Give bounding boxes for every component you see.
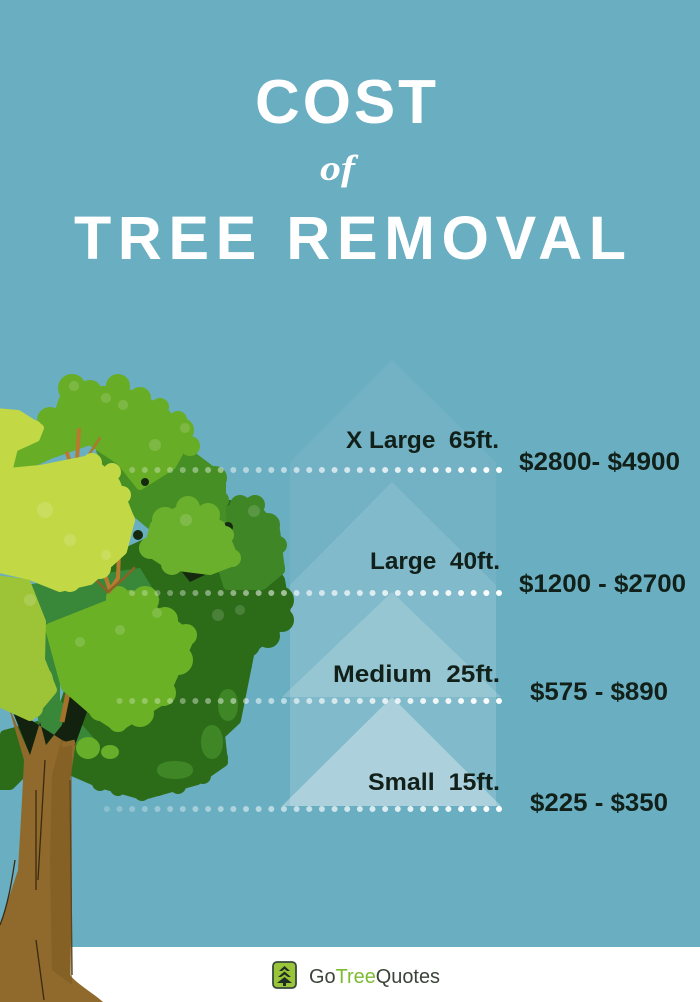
brown fork in the centre — [96, 552, 134, 592]
small lower patch of foliage — [76, 737, 119, 759]
size labels — [333, 427, 500, 796]
middle lobe — [143, 500, 237, 571]
tree illustration — [0, 378, 289, 1002]
size labels: Small 15ft. — [368, 769, 500, 796]
trunk — [0, 695, 103, 1002]
foliage speckle highlights — [24, 381, 260, 647]
brand name: GoTreeQuotes — [309, 966, 440, 988]
yellow-green top lobe — [0, 412, 131, 588]
icon: GoTreeQuotes logo — [273, 962, 296, 988]
main trunk fork branch — [62, 683, 70, 722]
shadow gap inside the canopy — [25, 568, 160, 745]
footer band — [0, 947, 700, 1002]
light yellow-green left lobe — [0, 580, 52, 716]
crown mid green foliage — [100, 450, 225, 525]
size labels: Medium 25ft. — [333, 661, 500, 688]
title: of — [320, 148, 358, 188]
upper branches — [67, 430, 100, 468]
dotted guide lines — [103, 470, 499, 809]
dark gaps — [116, 478, 233, 582]
dark back foliage — [0, 505, 289, 796]
price ranges: $2800- $4900 — [519, 448, 680, 476]
size arrows: stacked translucent houses — [282, 360, 501, 806]
price ranges: $1200 - $2700 — [519, 570, 686, 598]
right lobe mid green foliage — [162, 500, 282, 774]
price ranges: $225 - $350 — [530, 789, 668, 817]
size labels: Large 40ft. — [370, 548, 500, 575]
title: TREE REMOVAL — [74, 204, 626, 272]
lower bright green lobe — [50, 591, 192, 727]
size labels: X Large 65ft. — [346, 427, 499, 454]
dark shadow beneath the crown — [0, 670, 95, 755]
title — [74, 68, 626, 272]
title: COST — [255, 68, 436, 137]
crown bright green foliage — [11, 378, 196, 486]
price ranges — [519, 448, 686, 817]
price ranges: $575 - $890 — [530, 678, 668, 706]
